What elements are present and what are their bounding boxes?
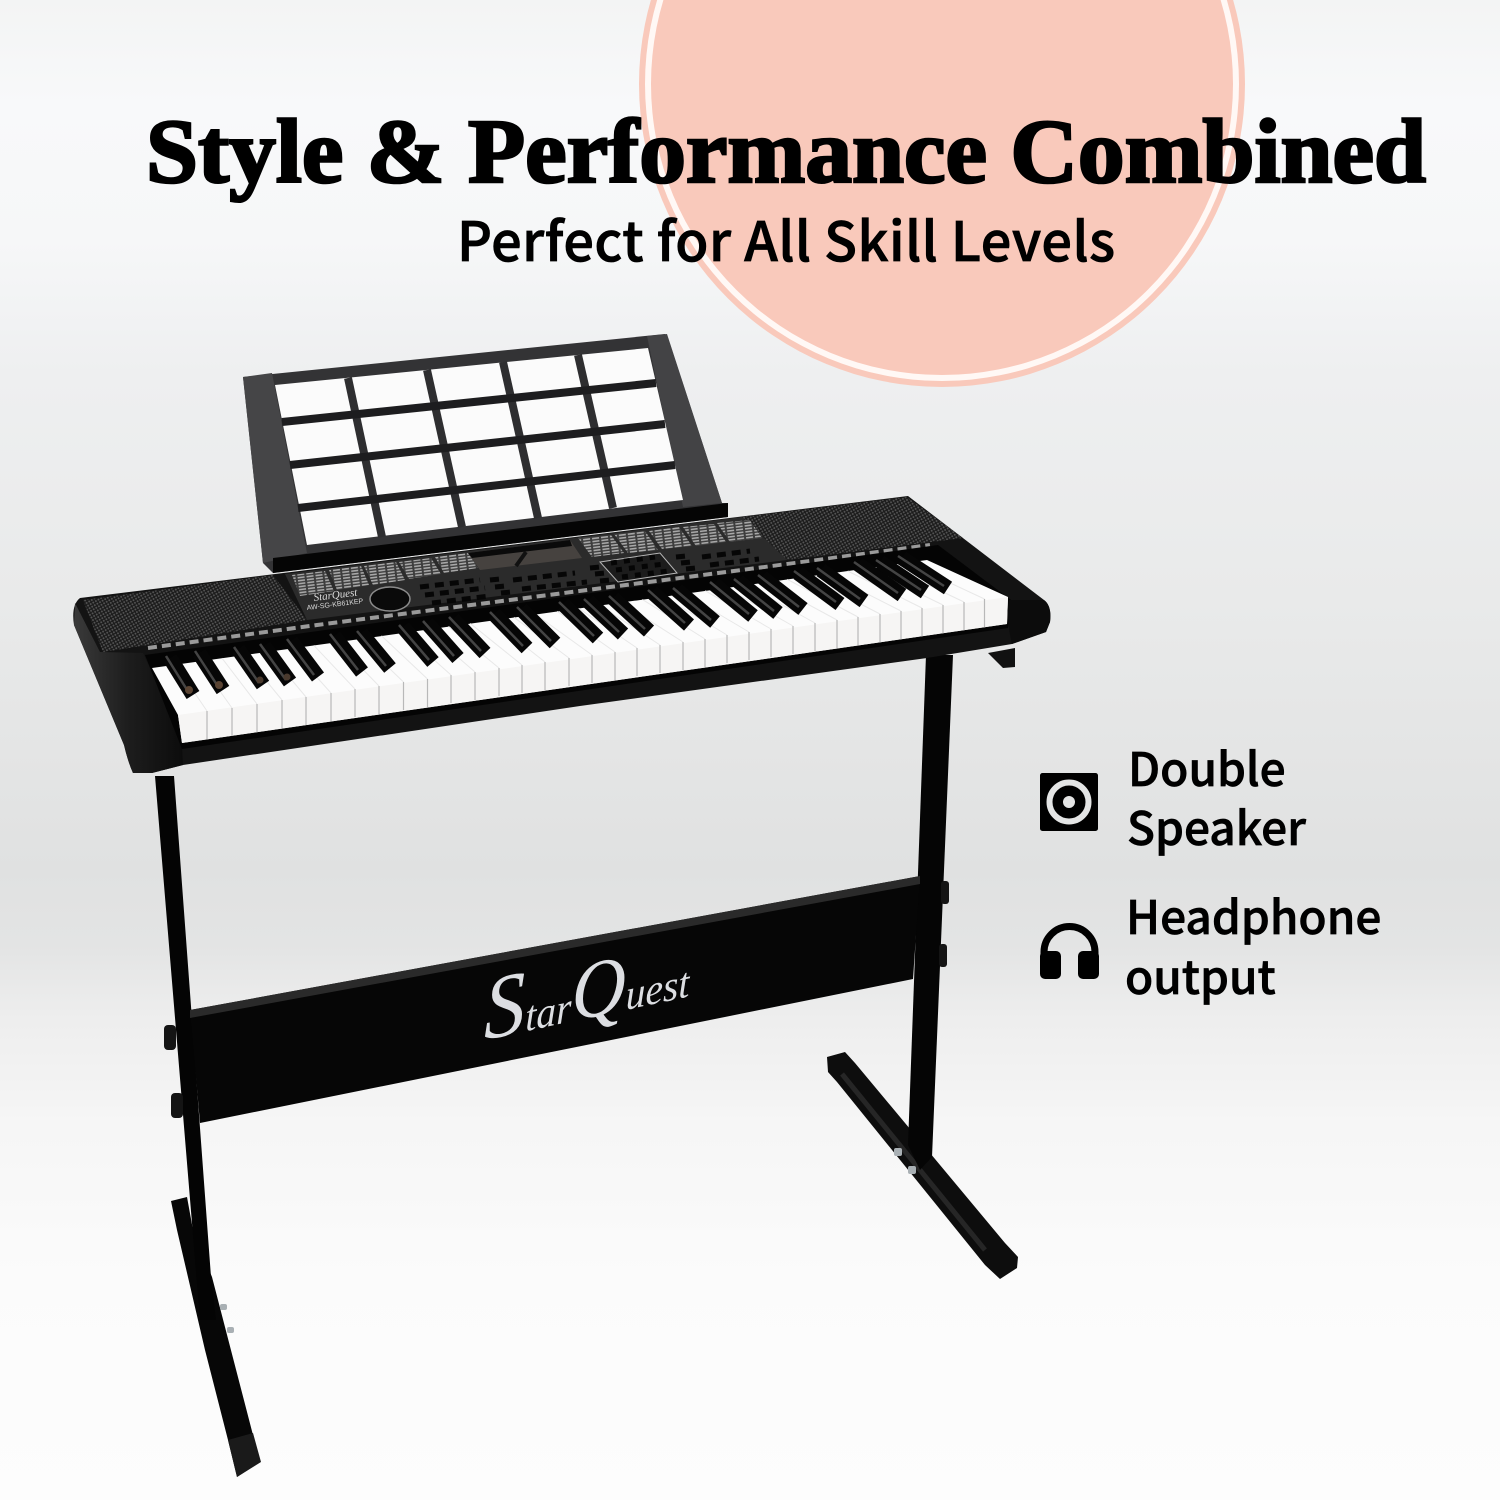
keyboard: left end cap (74, 603, 183, 773)
keyboard (73, 496, 1050, 773)
keyboard: black keys (166, 556, 948, 695)
panel: number pad (600, 553, 677, 582)
music stand: grid bars (348, 355, 613, 537)
music stand: openings (275, 348, 683, 545)
icon: speaker (1040, 773, 1098, 831)
panel: knob (370, 587, 410, 611)
keyboard: left speaker grille (83, 575, 307, 652)
label: double speaker: Double (1128, 734, 1286, 800)
feature: headphone output (1040, 882, 1392, 1008)
logo on cross bar: StarQuest (484, 917, 691, 1060)
stand: right foot (827, 1052, 1018, 1279)
panel: display (468, 540, 582, 570)
stand: bolts (220, 1148, 916, 1333)
stand: knobs (164, 881, 949, 1118)
stand: left upright (155, 776, 216, 1320)
stand: left foot (171, 1197, 260, 1477)
feature: double speaker (1040, 734, 1306, 859)
title: Style & Performance Combined (146, 101, 1426, 202)
keyboard: control panel (285, 517, 787, 620)
keyboard: right end cap (1008, 600, 1050, 644)
panel: small logo: StarQuest (313, 587, 359, 604)
panel: left text blocks (292, 553, 478, 596)
panel: model number: AW-SG-KB61KEP (306, 598, 364, 612)
panel: right text blocks (578, 520, 762, 557)
keyboard: right speaker grille (742, 497, 963, 560)
label: headphone output: Headphone (1126, 882, 1381, 948)
label: double speaker: Speaker (1127, 793, 1306, 859)
stand: cross bar (190, 876, 920, 1123)
keyboard: white keys (152, 560, 1008, 743)
stand: left foot cap (228, 1433, 261, 1477)
icon: headphones (1040, 927, 1099, 979)
keyboard: key well (145, 545, 1011, 749)
keyboard: label strip (148, 545, 930, 648)
subtitle: Perfect for All Skill Levels (457, 198, 1115, 277)
music stand: lip (273, 503, 728, 573)
keyboard: bracket (988, 648, 1015, 668)
stand (155, 655, 1018, 1477)
peach circle (639, 0, 1245, 387)
panel: buttons (420, 551, 759, 603)
label: headphone output: output (1125, 942, 1276, 1008)
music stand (243, 334, 728, 573)
keyboard: body (73, 496, 1050, 773)
stand: right upright (908, 655, 953, 1170)
